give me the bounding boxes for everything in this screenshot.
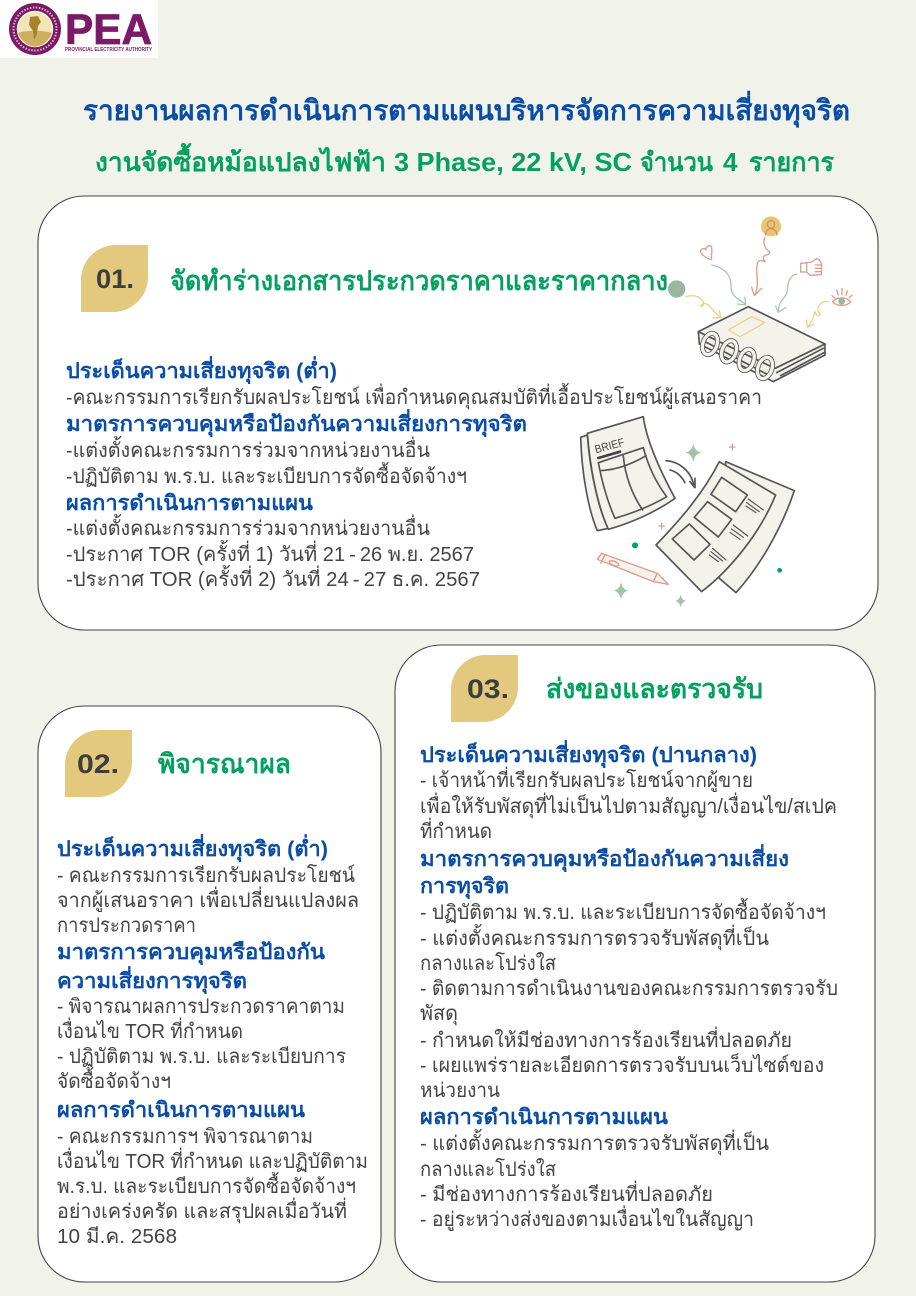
subtitle: งานจัดซื้อหม้อแปลงไฟฟ้า: [95, 142, 386, 177]
logo: PEA: PEA: [65, 6, 152, 54]
badge: 03: [451, 655, 518, 722]
text block: 01 control measures: [66, 408, 527, 488]
text block: 01 results: [66, 492, 480, 591]
text block: 03 risk issue: เพื่อให้รับพัสดุที่ไม่เป็นไปตามสัญญา/เงื่อนไข/สเปค: [420, 792, 837, 819]
text block: 02 control measures: มาตรการควบคุมหรือป้องกัน: [57, 940, 326, 966]
badge: 01: [81, 245, 148, 312]
heading: 01: จัดทำร่างเอกสารประกวดราคาและราคากลาง: [170, 266, 668, 296]
icon: brief documents and pencil: BRIEF: [594, 437, 626, 456]
text block: 03 control measures: - ปฏิบัติตาม พ.ร.บ. และระเบียบการจัดซื้อจัดจ้างฯ: [420, 898, 826, 924]
text block: 02 risk issue: - คณะกรรมการเรียกรับผลประโยชน์: [57, 864, 355, 887]
heading: 03: ส่งของและตรวจรับ: [546, 674, 763, 704]
text block: 03 risk issue: ที่กำหนด: [420, 817, 492, 843]
badge: 03: 03.: [467, 674, 509, 704]
text block: 02 control measures: เงื่อนไข TOR ที่กำหนด: [57, 1017, 243, 1043]
text block: 03 risk issue: ประเด็นความเสี่ยงทุจริต (ปานกลาง): [420, 739, 757, 769]
subtitle: 3 Phase, 22 kV, SC: [394, 147, 632, 177]
text block: 02 control measures: - ปฏิบัติตาม พ.ร.บ. และระเบียบการ: [57, 1046, 346, 1068]
text block: 02 results: [57, 1099, 368, 1248]
logo: PEA: PROVINCIAL ELECTRICITY AUTHORITY: [65, 47, 153, 53]
text block: 01 control measures: -ปฏิบัติตาม พ.ร.บ. และระเบียบการจัดซื้อจัดจ้างฯ: [66, 462, 467, 488]
panel: 02 evaluation: [38, 706, 381, 1282]
text block: 03 results: กลางและโปร่งใส: [420, 1158, 556, 1181]
text block: 02 results: - คณะกรรมการฯ พิจารณาตาม: [57, 1126, 313, 1148]
text block: 03 control measures: [420, 843, 838, 1102]
logo: PEA: [0, 0, 158, 58]
badge: 01: 01.: [96, 264, 134, 294]
text block: 01 results: -แต่งตั้งคณะกรรมการร่วมจากหน่วยงานอื่น: [66, 514, 430, 540]
panel: 03 delivery and inspection: [395, 645, 875, 1282]
text block: 03 control measures: กลางและโปร่งใส: [420, 952, 556, 975]
text block: 02 control measures: [57, 940, 346, 1093]
text block: 02 control measures: ความเสี่ยงการทุจริต: [57, 965, 247, 995]
text block: 03 control measures: - แต่งตั้งคณะกรรมการตรวจรับพัสดุที่เป็น: [420, 924, 769, 951]
text block: 01 results: ผลการดำเนินการตามแผน: [66, 492, 314, 515]
text block: 01 risk issue: -คณะกรรมการเรียกรับผลประโยชน์ เพื่อกำหนดคุณสมบัติที่เอื้อประโยชน์ผู้เสนอราคา: [66, 383, 762, 410]
text block: 02 control measures: - พิจารณาผลการประกวดราคาตาม: [57, 996, 345, 1018]
text block: 02 risk issue: ประเด็นความเสี่ยงทุจริต (ต่ำ): [57, 833, 328, 863]
text block: 01 results: -ประกาศ TOR (ครั้งที่ 1) วันที่ 21 - 26 พ.ย. 2567: [66, 540, 474, 566]
text block: 03 results: [420, 1106, 769, 1232]
text block: 02 risk issue: การประกวดราคา: [57, 915, 196, 937]
subtitle: [95, 142, 834, 177]
badge: 02: 02.: [77, 749, 119, 779]
text block: 03 risk issue: - เจ้าหน้าที่เรียกรับผลประโยชน์จากผู้ขาย: [420, 766, 753, 793]
text block: 01 risk issue: ประเด็นความเสี่ยงทุจริต (ต่ำ): [66, 355, 337, 385]
text block: 02 risk issue: จากผู้เสนอราคา เพื่อเปลี่ยนแปลงผล: [57, 886, 359, 913]
text block: 01 results: -ประกาศ TOR (ครั้งที่ 2) วันที่ 24 - 27 ธ.ค. 2567: [66, 565, 480, 591]
text block: 02 results: 10 มี.ค. 2568: [57, 1226, 177, 1248]
text block: 02 control measures: จัดซื้อจัดจ้างฯ: [57, 1067, 171, 1093]
subtitle: 4: [723, 147, 738, 177]
panel: 01 tender document preparation: [38, 196, 878, 630]
text block: 03 risk issue: [420, 739, 837, 843]
text block: 02 results: เงื่อนไข TOR ที่กำหนด และปฏิบัติตาม: [57, 1147, 368, 1173]
text block: 03 results: - อยู่ระหว่างส่งของตามเงื่อนไขในสัญญา: [420, 1205, 754, 1232]
text block: 01 control measures: -แต่งตั้งคณะกรรมการร่วมจากหน่วยงานอื่น: [66, 436, 430, 462]
text block: 03 control measures: มาตรการควบคุมหรือป้องกันความเสี่ยง: [420, 843, 789, 873]
icon: brief documents and pencil: [581, 417, 794, 607]
text block: 03 control measures: พัสดุ: [420, 1003, 458, 1026]
text block: 03 control measures: การทุจริต: [420, 875, 509, 900]
text block: 03 control measures: - ติดตามการดำเนินงานของคณะกรรมการตรวจรับ: [420, 978, 838, 1000]
text block: 01 risk issue: [66, 355, 762, 410]
text block: 03 control measures: - เผยแพร่รายละเอียดการตรวจรับบนเว็บไซต์ของ: [420, 1052, 824, 1077]
subtitle: จำนวน: [640, 147, 713, 177]
text block: 01 control measures: มาตรการควบคุมหรือป้องกันความเสี่ยงการทุจริต: [66, 408, 527, 438]
text block: 03 results: - แต่งตั้งคณะกรรมการตรวจรับพัสดุที่เป็น: [420, 1129, 769, 1156]
text block: 03 control measures: หน่วยงาน: [420, 1080, 500, 1102]
text block: 03 control measures: - กำหนดให้มีช่องทางการร้องเรียนที่ปลอดภัย: [420, 1026, 792, 1052]
text block: 02 results: พ.ร.บ. และระเบียบการจัดซื้อจัดจ้างฯ: [57, 1172, 356, 1198]
text block: 02 risk issue: [57, 833, 359, 937]
text block: 02 results: อย่างเคร่งครัด และสรุปผลเมื่อวันที่: [57, 1197, 347, 1224]
badge: 02: [65, 730, 132, 797]
heading: 02: พิจารณาผล: [158, 749, 291, 779]
text block: 03 results: - มีช่องทางการร้องเรียนที่ปลอดภัย: [420, 1180, 713, 1206]
subtitle: รายการ: [749, 147, 834, 177]
title: รายงานผลการดำเนินการตามแผนบริหารจัดการความเสี่ยงทุจริต: [83, 90, 850, 128]
icon: notebook with arrows: [668, 216, 852, 382]
text block: 03 results: ผลการดำเนินการตามแผน: [420, 1106, 669, 1129]
text block: 02 results: ผลการดำเนินการตามแผน: [57, 1099, 306, 1122]
